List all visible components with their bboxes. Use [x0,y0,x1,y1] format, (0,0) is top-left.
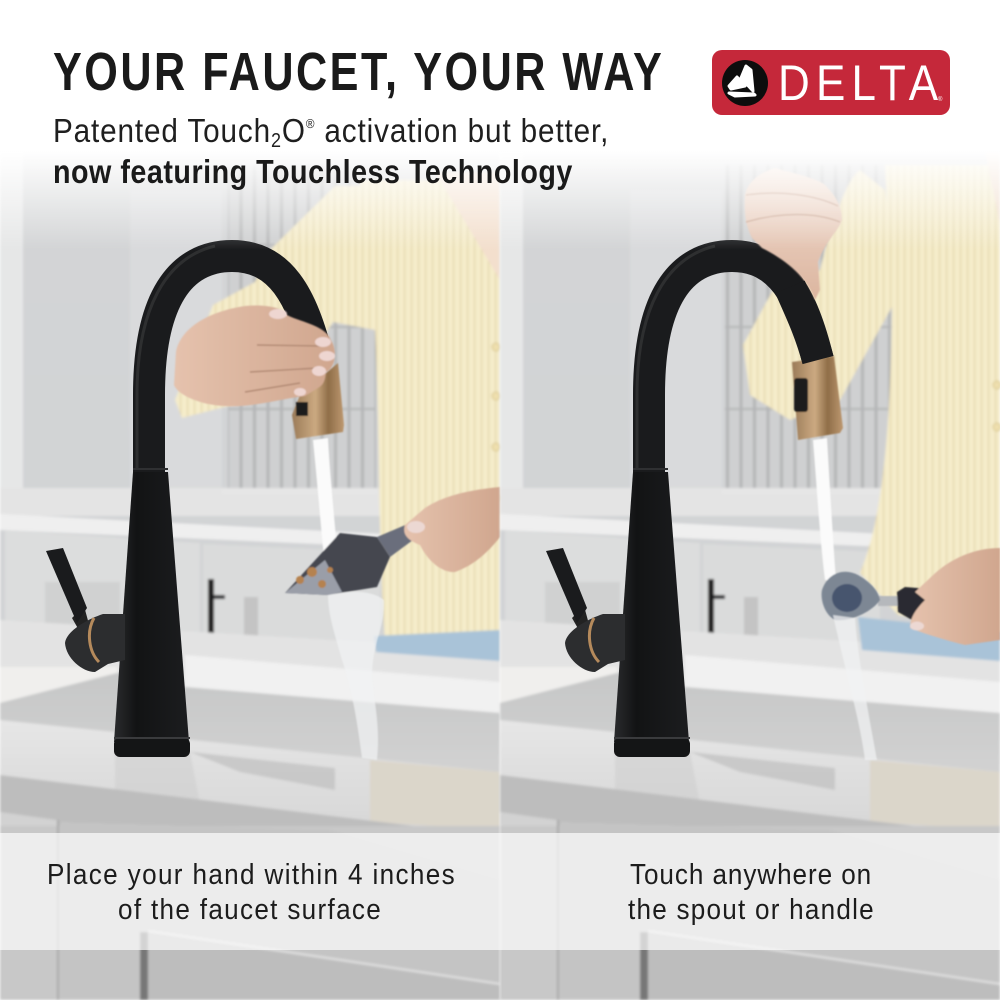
subtitle: line one: Patented Touch [53,113,271,149]
hand [174,305,335,406]
sleeve [175,186,385,418]
jeans [374,630,500,661]
scoop handle [897,587,942,620]
subtitle: line one: O [282,113,306,149]
panel: left photo, hand near faucet [0,0,500,1000]
tiled wall [228,165,376,490]
faucet head [792,356,843,440]
buttons [492,343,500,502]
caption: left [47,858,455,925]
faucet [46,246,318,757]
registered mark: ® [938,96,943,103]
caption: left: of the faucet surface [118,893,381,925]
logo: Delta [712,50,950,115]
caption: right: the spout or handle [628,893,874,925]
subtitle: line one: activation but better, [315,113,609,149]
caption: right: Touch anywhere on [630,858,871,890]
subtitle: line one: 2 [271,130,282,152]
tiled wall [725,165,893,490]
neckline skin [435,172,500,280]
panel: right photo, touching faucet [500,0,1000,1000]
title: YOUR FAUCET, YOUR WAY [53,43,662,102]
caption: left: Place your hand within 4 inches [47,858,455,890]
re-drawn spout in front of wrist [790,287,818,360]
raised hand [745,168,842,300]
spatula face [285,533,390,595]
right hand [404,487,500,572]
water stream [313,438,340,590]
water splash [328,592,384,760]
icon: Delta triangle mark [722,60,768,106]
fingernails [269,309,335,396]
top white fade [0,0,1000,250]
faucet head [292,363,344,439]
caption: right [628,858,874,925]
scoop bowl [822,572,880,620]
subtitle: line two: now featuring Touchless Technology [53,153,573,190]
wordmark: DELTA [778,54,939,111]
sweater body [860,165,1000,632]
scoop shaft [878,596,900,606]
water stream [813,438,836,580]
faucet [546,246,818,757]
finger creases [746,193,840,222]
spatula handle [377,523,413,557]
jeans [858,617,1000,661]
sleeve [743,170,893,420]
subtitle: line one: ® [306,116,315,131]
food crumbs [296,567,333,588]
right hand [910,548,1000,645]
neckline skin [985,150,1000,225]
water splash [833,615,877,760]
sweater [355,180,500,640]
buttons [993,381,1000,431]
caption band [0,833,1000,950]
